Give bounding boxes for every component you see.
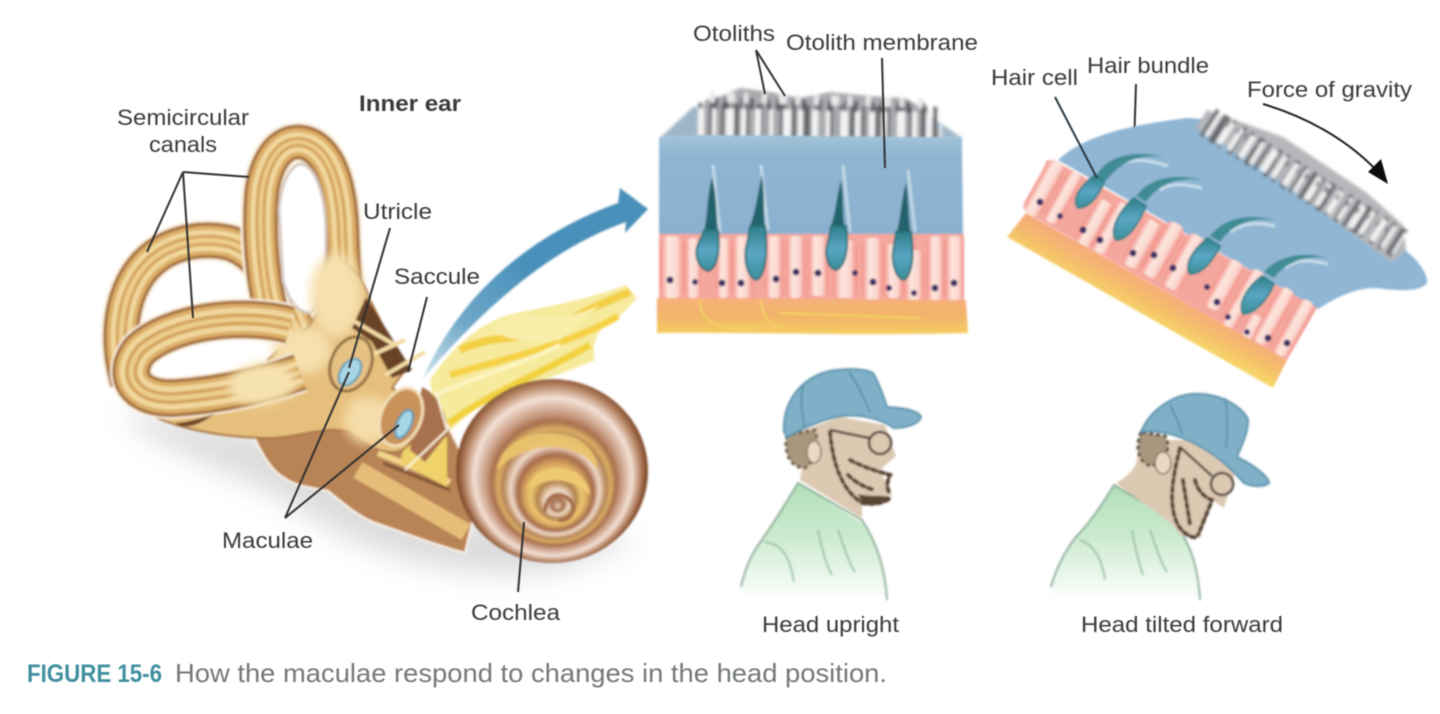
- tilted hair cells: [1076, 154, 1328, 314]
- hair: [1138, 432, 1168, 466]
- cochlea: [456, 379, 648, 563]
- label: Semicircular canals: Semicircular: [117, 105, 249, 130]
- otolith layer: [660, 88, 962, 138]
- caption: FIGURE 15-6: [27, 660, 162, 688]
- base layer: [657, 298, 968, 334]
- superior semicircular canal: [261, 142, 350, 325]
- icon: large blue arrow: [422, 188, 648, 380]
- horizontal ampulla: [226, 360, 298, 408]
- glasses: [1180, 447, 1233, 495]
- beard: [1172, 448, 1212, 537]
- label: Semicircular canals: canals: [149, 132, 217, 157]
- labels: heads: [762, 612, 1283, 637]
- vestibular nerve: [430, 285, 637, 440]
- ear: [1155, 452, 1171, 474]
- tilted otoliths: [1196, 110, 1406, 262]
- label: Hair bundle: Hair bundle: [1087, 53, 1209, 78]
- cap: [784, 369, 921, 437]
- shirt: [1051, 485, 1200, 600]
- label: Head tilted forward: Head tilted forward: [1081, 612, 1283, 637]
- saccule: [371, 382, 431, 452]
- head and neck: [1116, 440, 1236, 538]
- tilted membrane: [1058, 118, 1427, 309]
- glasses: [830, 430, 891, 454]
- hair: [786, 430, 817, 468]
- figure: head upright: [741, 369, 921, 600]
- tilted base: [1007, 213, 1287, 388]
- lower canal notch: [175, 414, 215, 426]
- label: Head upright: Head upright: [762, 612, 899, 637]
- utricle: [322, 331, 380, 397]
- vestibule: [118, 253, 413, 452]
- label: Hair cell: Hair cell: [991, 65, 1078, 90]
- labels: inner ear: [117, 91, 561, 625]
- panel: tilted macula: [1007, 110, 1427, 388]
- otolith membrane: [659, 135, 963, 240]
- inner ear illustration: [118, 142, 648, 574]
- shirt: [741, 483, 888, 600]
- lower membranous body: [250, 387, 480, 553]
- shadow under the ear: [120, 410, 640, 574]
- figure: head tilted: [1051, 394, 1269, 600]
- horizontal semicircular canal: [131, 319, 300, 398]
- label: Maculae: Maculae: [222, 528, 313, 553]
- leader lines: macula: [756, 50, 1136, 168]
- label: Saccule: Saccule: [394, 264, 480, 289]
- dark wedge and struts: [352, 297, 425, 378]
- label: Cochlea: Cochlea: [471, 600, 561, 625]
- leader lines: inner ear: [147, 172, 524, 592]
- labels: macula: [693, 21, 1412, 102]
- cell layer: [659, 234, 964, 302]
- label: Semicircular canals: [117, 105, 249, 157]
- ear: [807, 441, 821, 463]
- leader line: hair cell: [1055, 97, 1097, 178]
- panel: upright macula: [657, 88, 968, 334]
- ear artwork: [118, 142, 648, 563]
- beard fill: [858, 494, 891, 504]
- tilted cells: [1021, 157, 1317, 360]
- hair cells: [696, 165, 915, 280]
- label: Otoliths: Otoliths: [693, 21, 775, 46]
- label: Otolith membrane: Otolith membrane: [786, 30, 978, 55]
- icon: gravity arrow: [1263, 104, 1388, 184]
- caption: How the maculae respond to changes in the head position.: [175, 658, 887, 688]
- posterior semicircular canal: [121, 240, 305, 382]
- label: Inner ear: Inner ear: [359, 91, 461, 116]
- beard: [830, 432, 891, 504]
- head and neck: [788, 417, 896, 518]
- bony hole shading: [279, 164, 326, 313]
- label: Force of gravity: Force of gravity: [1247, 77, 1412, 102]
- label: Utricle: Utricle: [363, 199, 432, 224]
- cap: [1141, 394, 1269, 486]
